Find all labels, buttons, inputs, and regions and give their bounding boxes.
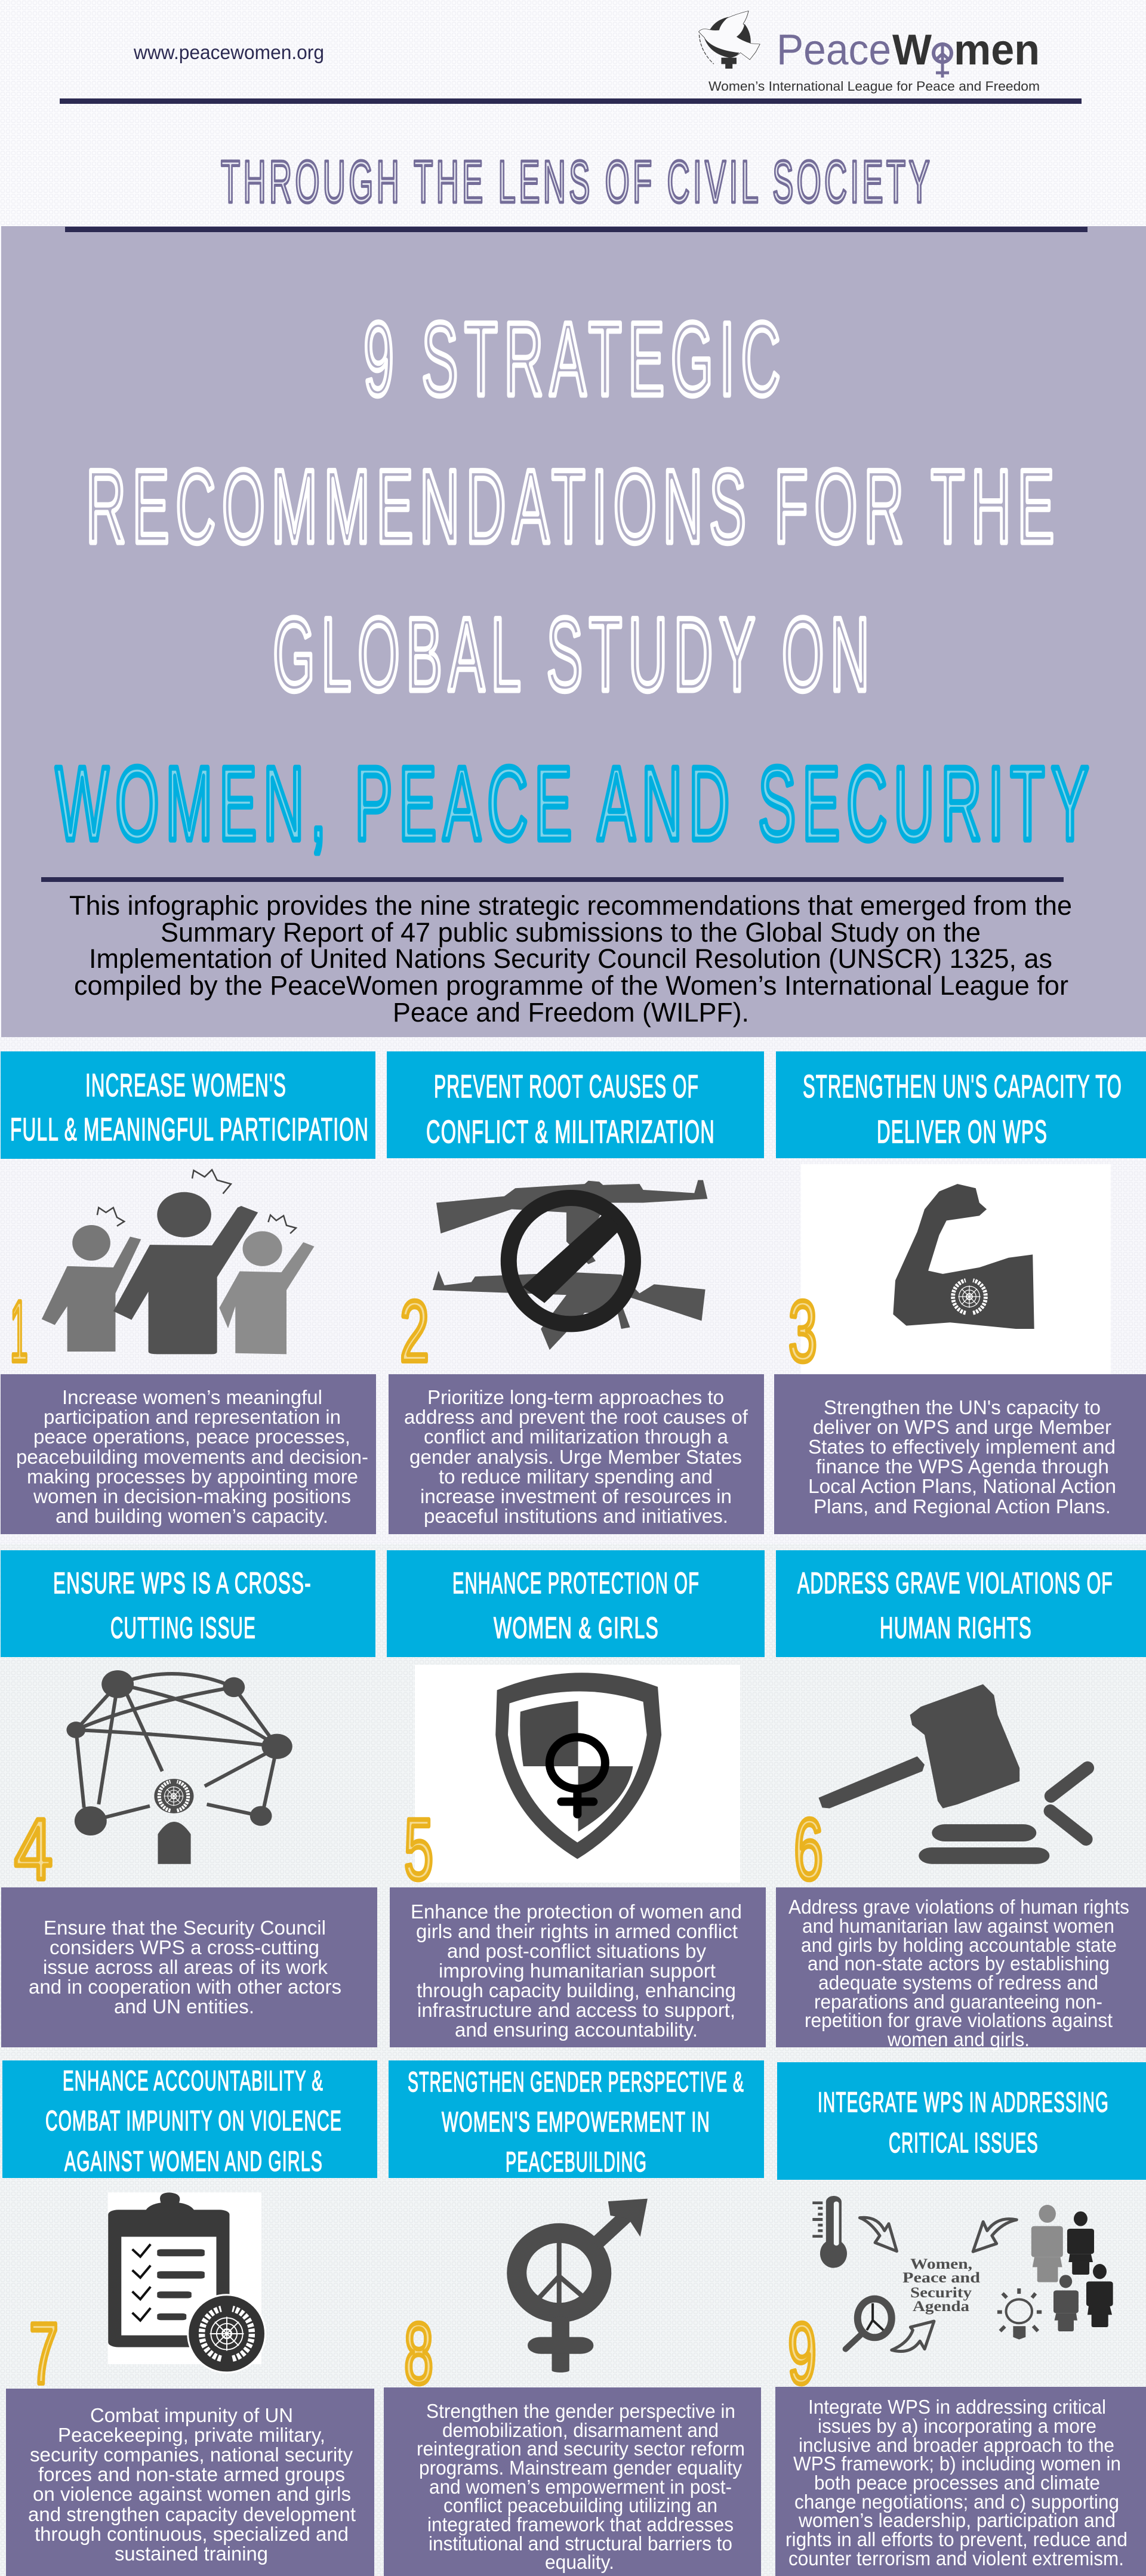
panel: recommendation 2 text: increase investment of resources in [420, 1485, 732, 1507]
panel: recommendation 9 text: women’s leadership, participation and [798, 2509, 1116, 2531]
number 3: 3 [788, 1283, 817, 1380]
panel: recommendation 5 text: infrastructure and access to support, [417, 1999, 735, 2021]
diagram label: Peace and [902, 2270, 980, 2286]
panel: recommendation 6 text: adequate systems of redress and [818, 1972, 1098, 1994]
panel: recommendation 1 text [1, 1374, 376, 1534]
panel: recommendation 4 heading: CUTTING ISSUE [110, 1611, 256, 1645]
panel: recommendation 5 heading: ENHANCE PROTECTION OF [452, 1566, 700, 1600]
panel: recommendation 4 text: and in cooperation with other actors [29, 1976, 341, 1998]
panel: recommendation 6 text: women and girls. [887, 2028, 1030, 2050]
panel: recommendation 4 text [1, 1887, 377, 2047]
panel: recommendation 9 text: inclusive and broader approach to the [799, 2434, 1114, 2456]
intro paragraph: compiled by the PeaceWomen programme of the Women’s International League for [74, 970, 1068, 1001]
panel: recommendation 7 text: security companies, national security [30, 2444, 353, 2466]
diagram label: Women, [910, 2256, 972, 2272]
panel: recommendation 7 text: and strengthen capacity development [28, 2503, 356, 2525]
panel: recommendation 1 heading [1, 1051, 375, 1159]
panel: recommendation 6 heading: HUMAN RIGHTS [880, 1611, 1032, 1645]
diagram label: Security [910, 2285, 972, 2301]
panel: recommendation 2 text: gender analysis. Urge Member States [409, 1446, 742, 1468]
panel: recommendation 3 text: finance the WPS Agenda through [816, 1455, 1109, 1477]
panel: recommendation 9 text: Integrate WPS in addressing critical [808, 2396, 1106, 2418]
panel: recommendation 6 heading [776, 1550, 1146, 1657]
panel: recommendation 9 heading: CRITICAL ISSUES [889, 2127, 1039, 2158]
panel: recommendation 6 text: Address grave violations of human rights [788, 1896, 1129, 1918]
panel: recommendation 9 text: rights in all efforts to prevent, reduce and [785, 2528, 1127, 2550]
number 6: 6 [794, 1801, 823, 1898]
panel: recommendation 8 text [384, 2387, 761, 2576]
panel: recommendation 9 text: WPS framework; b) including women in [793, 2452, 1121, 2475]
panel: recommendation 8 text: Strengthen the gender perspective in [426, 2400, 735, 2422]
panel: recommendation 7 text: Combat impunity of UN [90, 2404, 293, 2426]
panel: recommendation 1 text: Increase women’s meaningful [62, 1386, 322, 1408]
icon: dove [699, 11, 760, 69]
panel: recommendation 7 text [6, 2389, 374, 2576]
panel: recommendation 4 heading: ENSURE WPS IS A CROSS- [53, 1566, 312, 1600]
text: 1 [10, 1283, 28, 1380]
panel: recommendation 5 text: and post-conflict situations by [447, 1940, 706, 1962]
panel: recommendation 2 text: to reduce military spending and [439, 1466, 713, 1488]
panel: recommendation 4 text: issue across all areas of its work [43, 1956, 328, 1978]
intro paragraph: This infographic provides the nine strategic recommendations that emerged from the [69, 890, 1072, 921]
panel: recommendation 8 heading: WOMEN'S EMPOWERMENT IN [442, 2106, 710, 2137]
panel: recommendation 1 text: peace operations, peace processes, [33, 1426, 350, 1448]
icon: WPS agenda diagram [812, 2196, 1113, 2351]
panel: recommendation 4 text: considers WPS a cross-cutting [50, 1936, 319, 1958]
panel: recommendation 2 heading [387, 1051, 764, 1158]
panel: recommendation 6 text: and girls by holding accountable state [801, 1934, 1117, 1956]
panel: recommendation 9 text: change negotiations; and c) supporting [794, 2491, 1119, 2513]
icon: gender peace symbol [517, 2199, 648, 2373]
panel: recommendation 8 text: and women’s empowerment in post- [429, 2476, 732, 2498]
icon: protesting people [42, 1170, 315, 1354]
number 4: 4 [14, 1801, 53, 1898]
panel: recommendation 3 text: deliver on WPS and urge Member [813, 1416, 1111, 1438]
panel: recommendation 6 text [776, 1887, 1146, 2050]
header rule [60, 98, 1082, 104]
diagram label [902, 2256, 980, 2315]
panel: recommendation 3 text: Local Action Plans, National Action [808, 1475, 1116, 1497]
panel: recommendation 5 text: improving humanitarian support [439, 1960, 716, 1982]
panel: recommendation 2 text [389, 1374, 764, 1534]
panel: recommendation 1 text: participation and representation in [44, 1406, 341, 1428]
intro paragraph: Summary Report of 47 public submissions to the Global Study on the [161, 917, 981, 948]
icon: crossed rifles with prohibition sign [433, 1180, 707, 1350]
panel: recommendation 4 text: and UN entities. [114, 1995, 254, 2017]
panel: recommendation 4 text: Ensure that the Security Council [44, 1917, 326, 1939]
icon: peace female symbol [934, 44, 951, 78]
diagram label: Agenda [913, 2299, 970, 2315]
title [56, 301, 1095, 862]
panel: recommendation 6 text: repetition for grave violations against [805, 2009, 1113, 2031]
panel: recommendation 5 text: girls and their rights in armed conflict [416, 1920, 738, 1942]
panel: recommendation 8 heading: PEACEBUILDING [506, 2146, 647, 2177]
wordmark: Peace [777, 26, 891, 74]
panel: recommendation 2 heading: PREVENT ROOT CAUSES OF [434, 1069, 699, 1105]
panel: recommendation 1 text: and building women’s capacity. [56, 1505, 328, 1527]
panel: recommendation 7 text: through continuous, specialized and [35, 2523, 349, 2545]
panel: recommendation 5 text: through capacity building, enhancing [417, 1979, 736, 2001]
panel: recommendation 8 text: demobilization, disarmament and [442, 2419, 719, 2441]
number 2: 2 [400, 1283, 429, 1380]
icon: gavel [818, 1684, 1088, 1864]
logo: PeaceWomen [699, 11, 1040, 94]
panel: recommendation 7 heading: COMBAT IMPUNITY ON VIOLENCE [45, 2105, 342, 2136]
panel: recommendation 8 text: institutional and structural barriers to [429, 2532, 732, 2555]
panel: title block [1, 226, 1146, 1037]
icon: flexed arm with UN emblem [801, 1164, 1111, 1374]
panel: recommendation 9 heading [777, 2062, 1146, 2180]
panel: recommendation 3 text: Plans, and Regional Action Plans. [814, 1495, 1111, 1517]
panel: recommendation 8 text: programs. Mainstream gender equality [419, 2457, 742, 2479]
panel: recommendation 6 text: and humanitarian law against women [802, 1915, 1114, 1937]
intro paragraph: Implementation of United Nations Security Council Resolution (UNSCR) 1325, as [89, 943, 1052, 974]
panel: recommendation 5 heading [387, 1550, 765, 1657]
panel: recommendation 6 text: and non-state actors by establishing [808, 1952, 1110, 1975]
panel: recommendation 1 text: women in decision-making positions [33, 1485, 351, 1507]
intro paragraph: Peace and Freedom (WILPF). [393, 997, 749, 1028]
panel: recommendation 7 text: Peacekeeping, private military, [58, 2424, 325, 2446]
panel: recommendation 3 heading [776, 1051, 1146, 1158]
panel: recommendation 2 heading: CONFLICT & MILITARIZATION [426, 1114, 715, 1150]
number 8: 8 [404, 2305, 433, 2402]
icon: shield with female symbol [415, 1665, 740, 1883]
panel: recommendation 8 text: conflict peacebuilding utilizing an [443, 2494, 717, 2516]
panel: recommendation 7 heading: AGAINST WOMEN AND GIRLS [64, 2145, 323, 2177]
panel: recommendation 7 text: sustained training [115, 2543, 268, 2565]
panel: recommendation 5 text [390, 1887, 766, 2047]
panel: recommendation 5 text: Enhance the protection of women and [411, 1901, 742, 1923]
panel: recommendation 8 heading [389, 2060, 764, 2178]
panel: recommendation 1 heading: INCREASE WOMEN'S [85, 1068, 286, 1103]
panel: recommendation 4 heading [1, 1550, 375, 1657]
website url: www.peacewomen.org [133, 41, 324, 63]
number 7: 7 [29, 2305, 58, 2402]
panel: recommendation 9 text: issues by a) incorporating a more [818, 2415, 1096, 2437]
panel: recommendation 2 text: Prioritize long-term approaches to [427, 1386, 724, 1408]
panel: recommendation 7 text: on violence against women and girls [33, 2483, 351, 2505]
panel: recommendation 8 text: integrated framework that addresses [427, 2513, 734, 2535]
panel: recommendation 6 text: reparations and guaranteeing non- [814, 1991, 1102, 2013]
panel: recommendation 7 heading: ENHANCE ACCOUNTABILITY & [63, 2065, 324, 2096]
panel: recommendation 1 heading: FULL & MEANINGFUL PARTICIPATION [10, 1112, 369, 1147]
icon: clipboard checklist with UN emblem [108, 2192, 265, 2373]
panel: recommendation 9 text: counter terrorism and violent extremism. [788, 2547, 1124, 2569]
tagline: Women’s International League for Peace and Freedom [708, 79, 1040, 94]
panel: recommendation 8 text: equality. [545, 2551, 614, 2573]
number 5: 5 [404, 1801, 433, 1898]
panel: recommendation 9 text [775, 2387, 1146, 2576]
panel: recommendation 2 text: address and prevent the root causes of [404, 1406, 748, 1428]
icon: network around UN emblem [66, 1670, 292, 1864]
panel: recommendation 2 text: peaceful institutions and initiatives. [424, 1505, 728, 1527]
logo: PeaceWomen: W [892, 26, 932, 74]
number 9: 9 [788, 2305, 817, 2402]
panel: recommendation 7 text: forces and non-state armed groups [38, 2463, 345, 2485]
panel: recommendation 3 text [774, 1374, 1146, 1534]
logo: PeaceWomen: men [954, 26, 1040, 74]
panel: recommendation 5 heading: WOMEN & GIRLS [494, 1611, 659, 1645]
panel: recommendation 5 text: and ensuring accountability. [455, 2019, 698, 2041]
panel: recommendation 2 text: conflict and militarization through a [424, 1426, 729, 1448]
panel: recommendation 3 text: Strengthen the UN's capacity to [824, 1396, 1101, 1418]
panel: recommendation 3 text: States to effectively implement and [808, 1436, 1116, 1458]
intro paragraph [69, 890, 1072, 1028]
panel: recommendation 7 heading [2, 2060, 377, 2178]
panel: recommendation 9 text: both peace processes and climate [814, 2472, 1100, 2494]
panel: recommendation 1 text: peacebuilding movements and decision- [16, 1446, 368, 1468]
panel: recommendation 1 text: making processes by appointing more [27, 1466, 358, 1488]
panel: recommendation 8 text: reintegration and security sector reform [417, 2438, 745, 2460]
panel: recommendation 8 heading: STRENGTHEN GENDER PERSPECTIVE & [408, 2066, 744, 2097]
